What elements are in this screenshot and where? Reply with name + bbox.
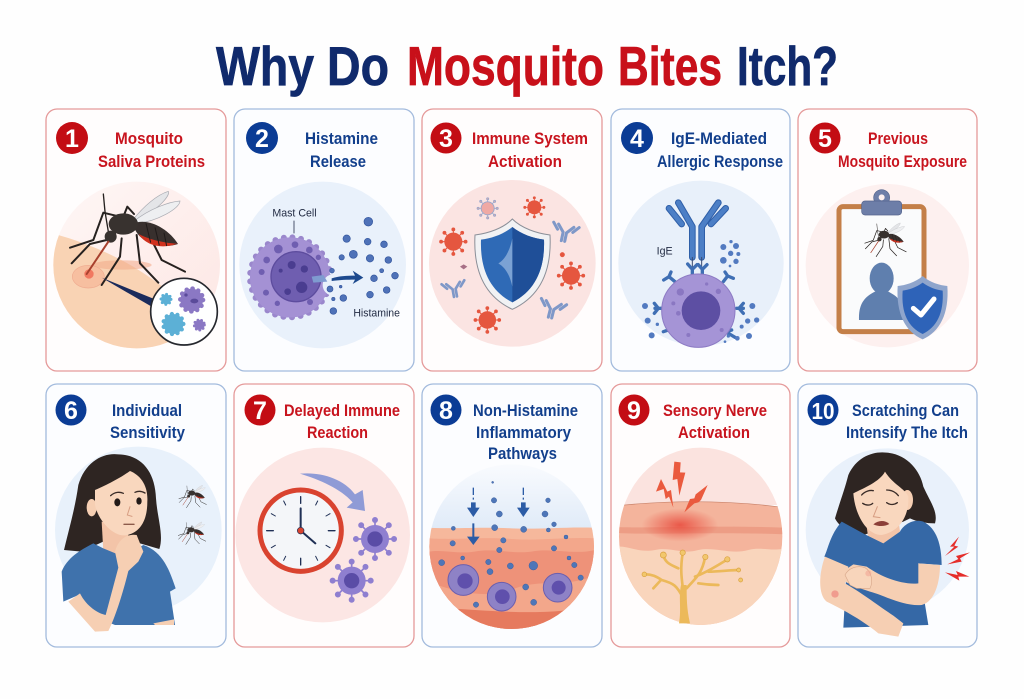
mosquito [70, 191, 185, 285]
arrow [332, 271, 363, 284]
heading: Histamine Release: Histamine [305, 129, 378, 148]
badge: number 5: 5 [818, 125, 832, 153]
panel: 1 Mosquito Saliva Proteins [46, 109, 226, 371]
label: IgE: IgE [657, 245, 673, 257]
illustration: irritated skin with sensory nerve [615, 445, 788, 628]
panel: 10 Scratching Can Intensify The Itch [798, 384, 977, 647]
heading: Scratching Can Intensify The Itch: Intensify The Itch [846, 423, 968, 442]
title: Bites [618, 35, 722, 97]
badge: number 7 [244, 394, 276, 426]
label: Histamine: Histamine [353, 308, 400, 320]
heading: Scratching Can Intensify The Itch [846, 401, 968, 442]
mediator dots [439, 481, 583, 607]
panel: 4 IgE-Mediated Allergic Response [611, 109, 790, 371]
heading: IgE-Mediated Allergic Response: Allergic Response [657, 152, 783, 171]
heading: Sensory Nerve Activation: Sensory Nerve [663, 401, 767, 420]
heading: Individual Sensitivity: Sensitivity [110, 423, 185, 442]
IgE antibody [669, 203, 726, 267]
heading: Immune System Activation [472, 129, 588, 171]
heading: Delayed Immune Reaction: Reaction [307, 423, 368, 442]
badge: number 4 [621, 122, 653, 154]
immune cells [448, 565, 572, 611]
heading: IgE-Mediated Allergic Response: IgE-Mediated [671, 129, 767, 148]
badge: number 1 [56, 122, 88, 154]
heading: Individual Sensitivity: Individual [112, 401, 182, 420]
badge: number 6: 6 [64, 397, 78, 425]
heading: Previous Mosquito Exposure: Previous [868, 129, 928, 148]
badge: number 10: 10 [812, 398, 834, 424]
heading: Mosquito Saliva Proteins: Mosquito [115, 129, 183, 148]
clipboard [839, 190, 924, 332]
panel: 2 Histamine Release [234, 109, 414, 371]
badge: number 2 [246, 122, 278, 154]
illustration: clipboard with record and shield [806, 184, 969, 347]
label: Mast Cell: Mast Cell [272, 208, 317, 220]
badge: number 8: 8 [439, 397, 453, 425]
heading: Immune System Activation: Activation [488, 152, 562, 171]
cell [654, 264, 743, 347]
heading: Immune System Activation: Immune System [472, 129, 588, 148]
histamine granules [327, 217, 398, 314]
badge: number 6 [56, 394, 86, 426]
woman [62, 454, 176, 632]
down arrows [467, 488, 530, 545]
title: Why Do [216, 35, 389, 97]
heading: IgE-Mediated Allergic Response [657, 129, 783, 171]
illustration: skin cross-section with inflammatory cells [429, 477, 594, 629]
panel: 3 Immune System Activation [422, 109, 602, 371]
small mosquito [865, 223, 906, 257]
panel: 7 Delayed Immune Reaction [234, 384, 414, 647]
heading: Previous Mosquito Exposure: Mosquito Exposure [838, 152, 967, 171]
delayed immune cells [331, 518, 396, 602]
magnified proteins callout [151, 278, 217, 345]
heading: Non-Histamine Inflammatory Pathways: Inflammatory [476, 423, 571, 442]
title: Itch? [737, 35, 838, 97]
mast cell [250, 237, 344, 317]
clock [260, 490, 341, 571]
badge: number 7: 7 [253, 397, 267, 425]
nerve [644, 553, 738, 623]
badge: number 3 [430, 122, 462, 154]
heading: Previous Mosquito Exposure [838, 129, 967, 171]
heading: Sensory Nerve Activation [663, 401, 767, 442]
illustration: mosquito biting skin with magnified proteins [50, 182, 220, 353]
heading: Delayed Immune Reaction: Delayed Immune [284, 401, 400, 420]
heading: Non-Histamine Inflammatory Pathways: Pathways [488, 444, 557, 463]
heading: Delayed Immune Reaction [284, 401, 400, 442]
illustration: IgE antibody on a mast cell [618, 181, 784, 347]
heading: Individual Sensitivity [110, 401, 185, 442]
illustration: mast cell releasing histamine [239, 182, 406, 348]
badge: number 1: 1 [65, 125, 79, 153]
title [216, 35, 838, 97]
heading: Histamine Release: Release [310, 152, 366, 171]
heading: Non-Histamine Inflammatory Pathways [473, 401, 578, 463]
badge: number 2: 2 [255, 125, 269, 153]
badge: number 10 [808, 394, 838, 426]
shield with check [897, 276, 948, 339]
shield [475, 219, 550, 309]
panel: 5 Previous Mosquito Exposure [798, 109, 977, 371]
person silhouette [859, 263, 905, 320]
viruses [440, 197, 585, 333]
badge: number 8 [430, 394, 462, 426]
badge: number 3: 3 [439, 125, 453, 153]
title: Mosquito [407, 35, 604, 97]
lightning bolts [656, 462, 708, 512]
heading: Sensory Nerve Activation: Activation [678, 423, 750, 442]
released granules [642, 240, 759, 343]
woman [820, 452, 942, 637]
delay arrow [300, 473, 365, 511]
illustration: shield with viruses and antibodies [429, 180, 596, 347]
heading: Non-Histamine Inflammatory Pathways: Non-Histamine [473, 401, 578, 420]
heading: Mosquito Saliva Proteins: Saliva Proteins [98, 152, 205, 171]
badge: number 9: 9 [627, 397, 641, 425]
panel: 9 Sensory Nerve Activation [611, 384, 790, 647]
panel: 6 Individual Sensitivity [46, 384, 226, 647]
illustration: woman scratching her arm [806, 448, 970, 637]
panel: 8 Non-Histamine Inflammatory Pathways [422, 384, 602, 647]
itch bolts [945, 537, 970, 581]
heading: Mosquito Saliva Proteins [98, 129, 205, 171]
heading: Scratching Can Intensify The Itch: Scratching Can [852, 401, 959, 420]
illustration: thoughtful woman with mosquitoes [55, 447, 222, 632]
illustration: clock and delayed immune cells [235, 448, 410, 622]
heading: Histamine Release [305, 129, 378, 171]
mosquitoes [179, 485, 206, 508]
badge: number 4: 4 [630, 125, 644, 153]
antibodies [442, 222, 579, 321]
badge: number 9 [618, 394, 650, 426]
badge: number 5 [810, 122, 840, 154]
